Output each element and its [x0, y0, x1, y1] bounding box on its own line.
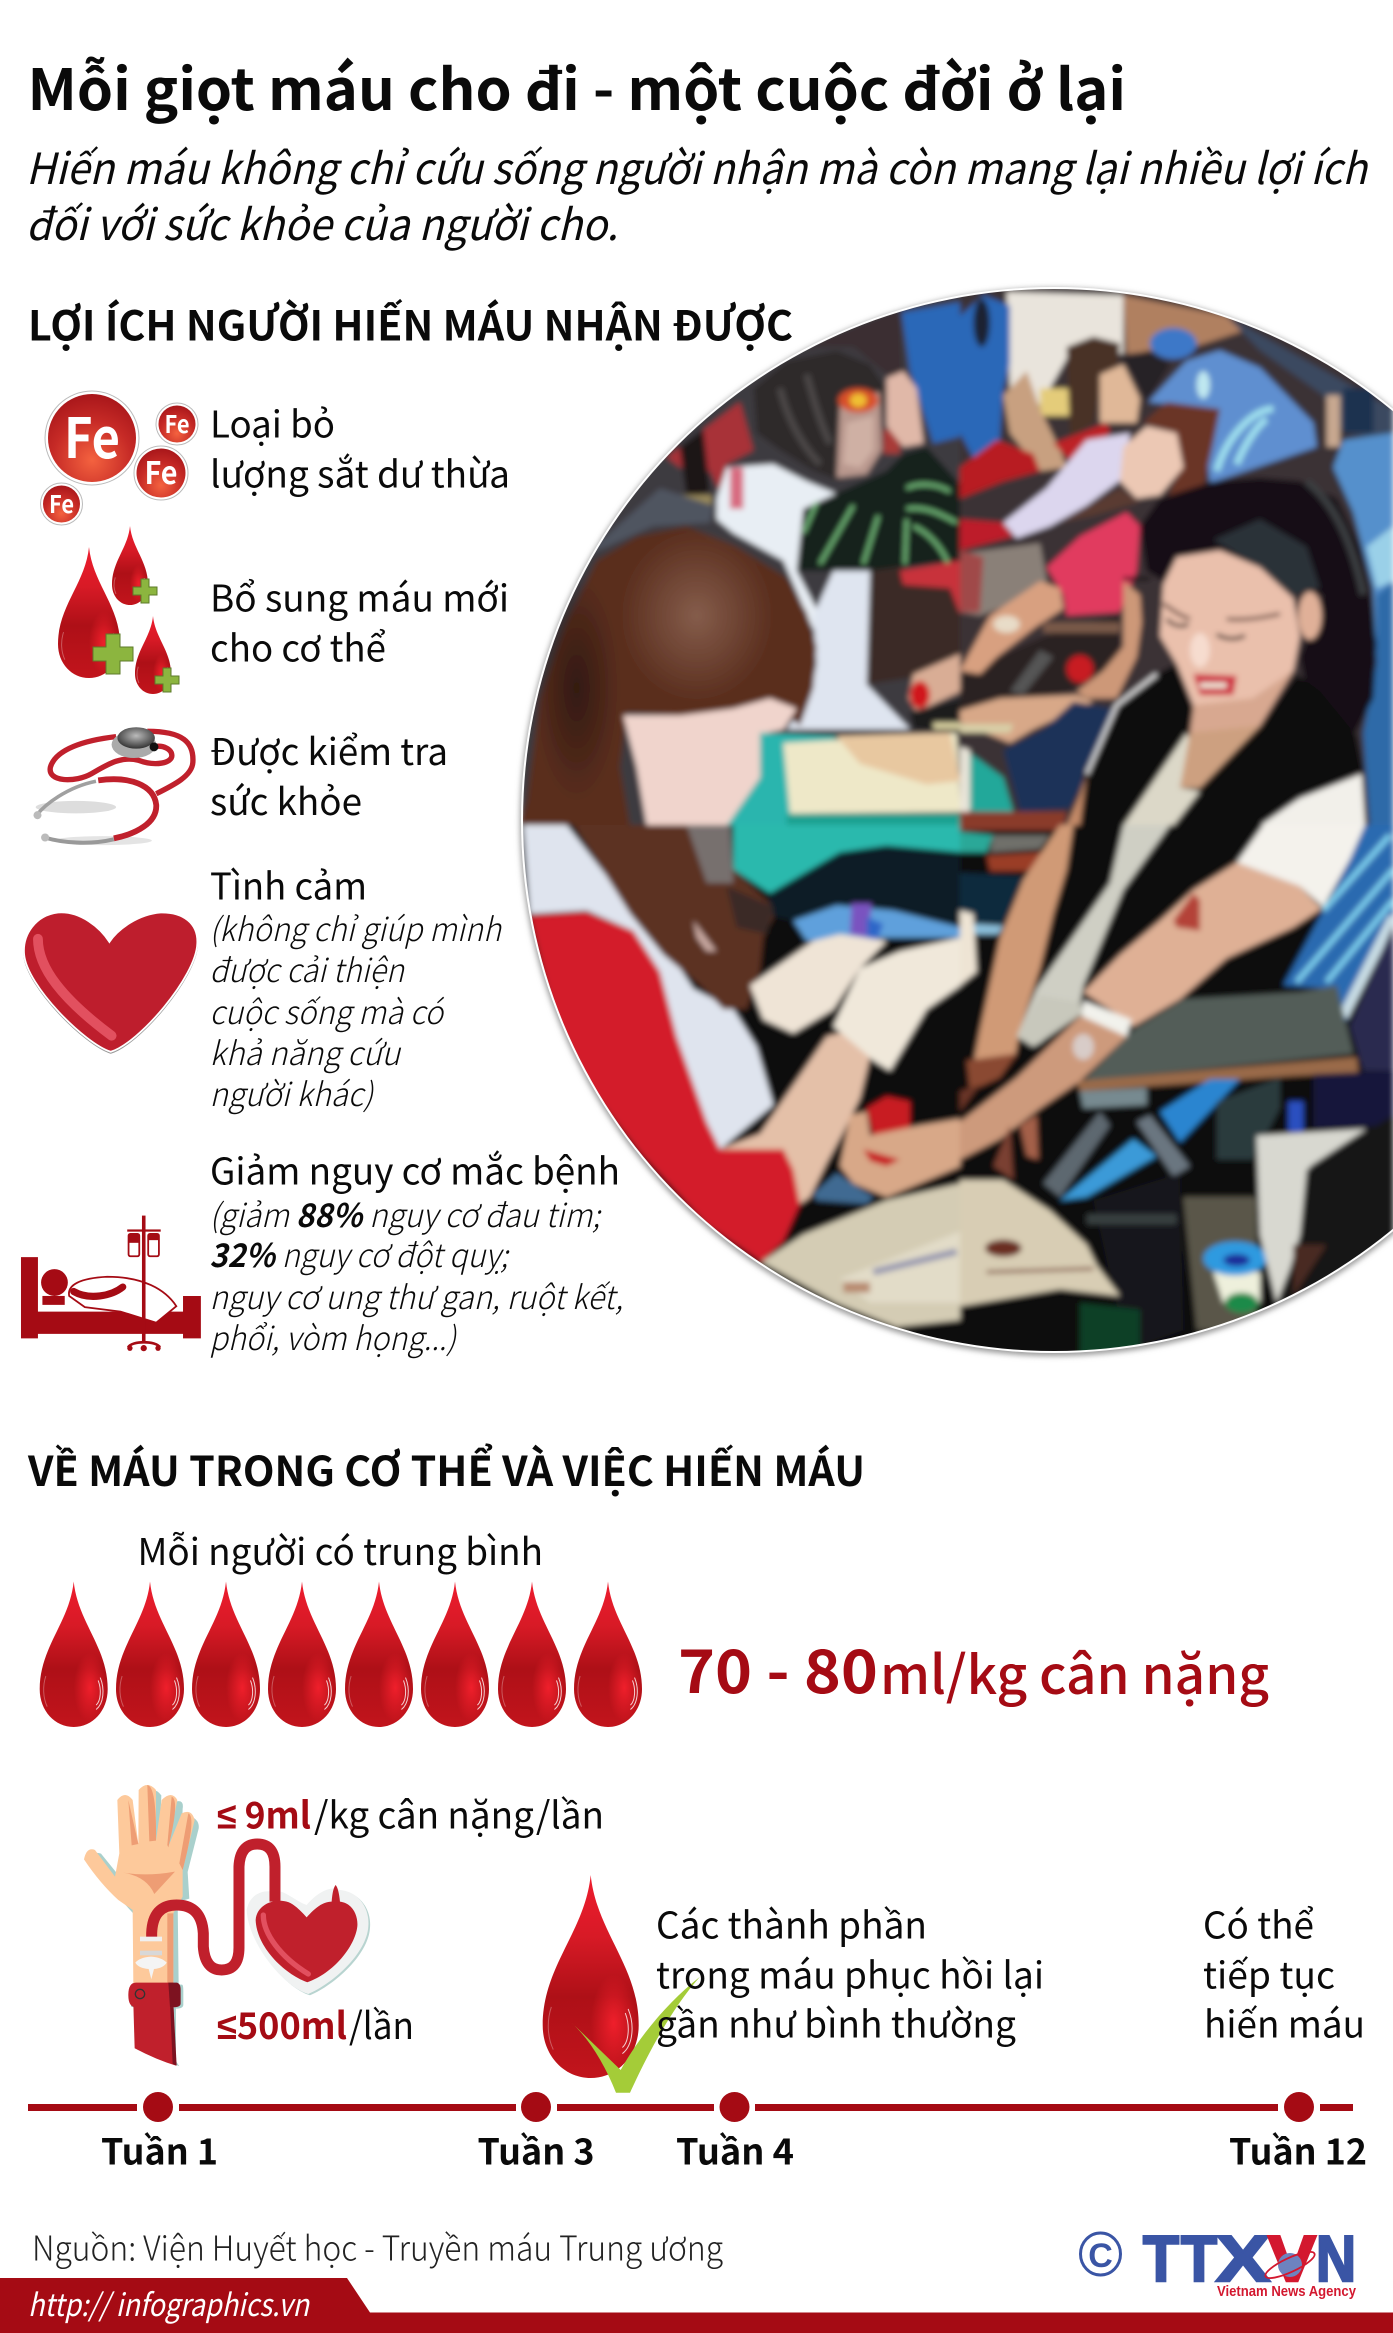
- logo: TTXVN: [1080, 2222, 1357, 2300]
- timeline: Tuần 3: [478, 2124, 594, 2176]
- stat: blood per kg: 70 - 80: [678, 1624, 878, 1711]
- benefit text: disease risk: [210, 1142, 623, 1360]
- timeline: Tuần 4: [676, 2124, 794, 2176]
- icon: hospital bed with IV: [21, 1216, 201, 1351]
- benefit text: iron: [210, 394, 510, 498]
- title: Mỗi giọt máu cho đi - một cuộc đời ở lại: [28, 45, 1126, 127]
- benefit text: emotion: khả năng cứu: [210, 1028, 402, 1075]
- icon: iron balls: [40, 391, 198, 525]
- text: week 12 donate again: Có thể: [1203, 1896, 1314, 1950]
- footer band: http:// infographics.vn: [28, 2280, 311, 2325]
- benefit text: new blood: Bổ sung máu mới: [210, 568, 509, 622]
- icon: blood drops with plus: [58, 526, 179, 694]
- logo: TTXVN: V: [1268, 2222, 1316, 2295]
- logo: TTXVN: X: [1216, 2222, 1270, 2295]
- benefit text: disease risk: (giảm 88% nguy cơ đau tim;: [210, 1190, 602, 1237]
- benefit text: iron: Loại bỏ: [210, 394, 335, 448]
- text: average: Mỗi người có trung bình: [138, 1522, 543, 1576]
- timeline: Tuần 1: [101, 2124, 218, 2176]
- icon: iron balls: Fe: [64, 394, 120, 474]
- stat: per kg limit: ≤ 9ml: [217, 1786, 311, 1840]
- benefit text: emotion: (không chỉ giúp mình: [210, 904, 503, 951]
- benefit text: iron: lượng sắt dư thừa: [210, 444, 510, 498]
- subtitle: [26, 135, 1369, 253]
- stat: per donation limit: ≤500ml: [217, 1996, 347, 2050]
- stat: per donation limit: /lần: [349, 1996, 414, 2050]
- icon: blood drop with check: [543, 1875, 700, 2093]
- benefit text: new blood: [210, 568, 509, 672]
- text: week 3 recovery: gần như bình thường: [656, 1994, 1016, 2048]
- text: week 3 recovery: [656, 1896, 1044, 2048]
- heading: benefits: LỢI ÍCH NGƯỜI HIẾN MÁU NHẬN ĐƯỢC: [28, 292, 793, 352]
- benefit text: disease risk: Giảm nguy cơ mắc bệnh: [210, 1142, 620, 1196]
- benefit text: health check: [210, 722, 448, 826]
- text: week 12 donate again: [1203, 1896, 1365, 2048]
- icon: iron balls: Fe: [164, 405, 190, 440]
- benefit text: emotion: người khác): [210, 1069, 375, 1116]
- stat: blood per kg: ml/kg cân nặng: [880, 1634, 1269, 1710]
- benefit text: emotion: Tình cảm: [210, 856, 367, 910]
- icon: stethoscope: [33, 727, 193, 845]
- timeline: [28, 2092, 1367, 2176]
- benefit text: emotion: cuộc sống mà có: [210, 987, 446, 1034]
- photo: blood donation in circular frame: [520, 285, 1393, 1361]
- benefit text: disease risk: nguy cơ ung thư gan, ruột kết,: [210, 1272, 623, 1319]
- text: week 12 donate again: tiếp tục: [1203, 1946, 1335, 2000]
- benefit text: health check: Được kiểm tra: [210, 722, 448, 776]
- logo: TTXVN: T: [1181, 2222, 1217, 2295]
- benefit text: new blood: cho cơ thể: [210, 618, 386, 672]
- text: week 12 donate again: hiến máu: [1204, 1994, 1365, 2048]
- benefit text: health check: sức khỏe: [210, 772, 362, 826]
- icon: row of eight blood drops: [40, 1582, 642, 1727]
- icon: iron balls: Fe: [49, 485, 74, 520]
- subtitle: đối với sức khỏe của người cho.: [26, 191, 618, 253]
- logo: TTXVN: N: [1316, 2222, 1356, 2295]
- stat: per donation limit: [217, 1996, 414, 2050]
- benefit text: disease risk: phổi, vòm họng...): [210, 1313, 458, 1360]
- source: Nguồn: Viện Huyết học - Truyền máu Trung ương: [32, 2222, 723, 2270]
- logo: TTXVN: C: [1088, 2237, 1113, 2275]
- stat: per kg limit: /kg cân nặng/lần: [314, 1786, 604, 1840]
- icon: iron balls: Fe: [144, 448, 178, 493]
- benefit text: disease risk: 32% nguy cơ đột quỵ;: [210, 1230, 510, 1277]
- icon: heart: [24, 912, 197, 1053]
- heading: about blood: VỀ MÁU TRONG CƠ THỂ VÀ VIỆC HIẾN MÁU: [27, 1438, 865, 1498]
- benefit text: emotion: [210, 856, 503, 1116]
- stat: blood per kg: [678, 1624, 1269, 1711]
- icon: arm donating blood to heart bag: [84, 1785, 370, 2066]
- text: week 3 recovery: Các thành phần: [656, 1896, 927, 1950]
- text: week 3 recovery: trong máu phục hồi lại: [656, 1946, 1044, 2000]
- footer band: [0, 2278, 1393, 2333]
- timeline: Tuần 12: [1229, 2124, 1367, 2176]
- benefit text: emotion: được cải thiện: [210, 945, 406, 992]
- logo: TTXVN: T: [1143, 2222, 1179, 2295]
- logo: TTXVN: Vietnam News Agency: [1217, 2283, 1357, 2300]
